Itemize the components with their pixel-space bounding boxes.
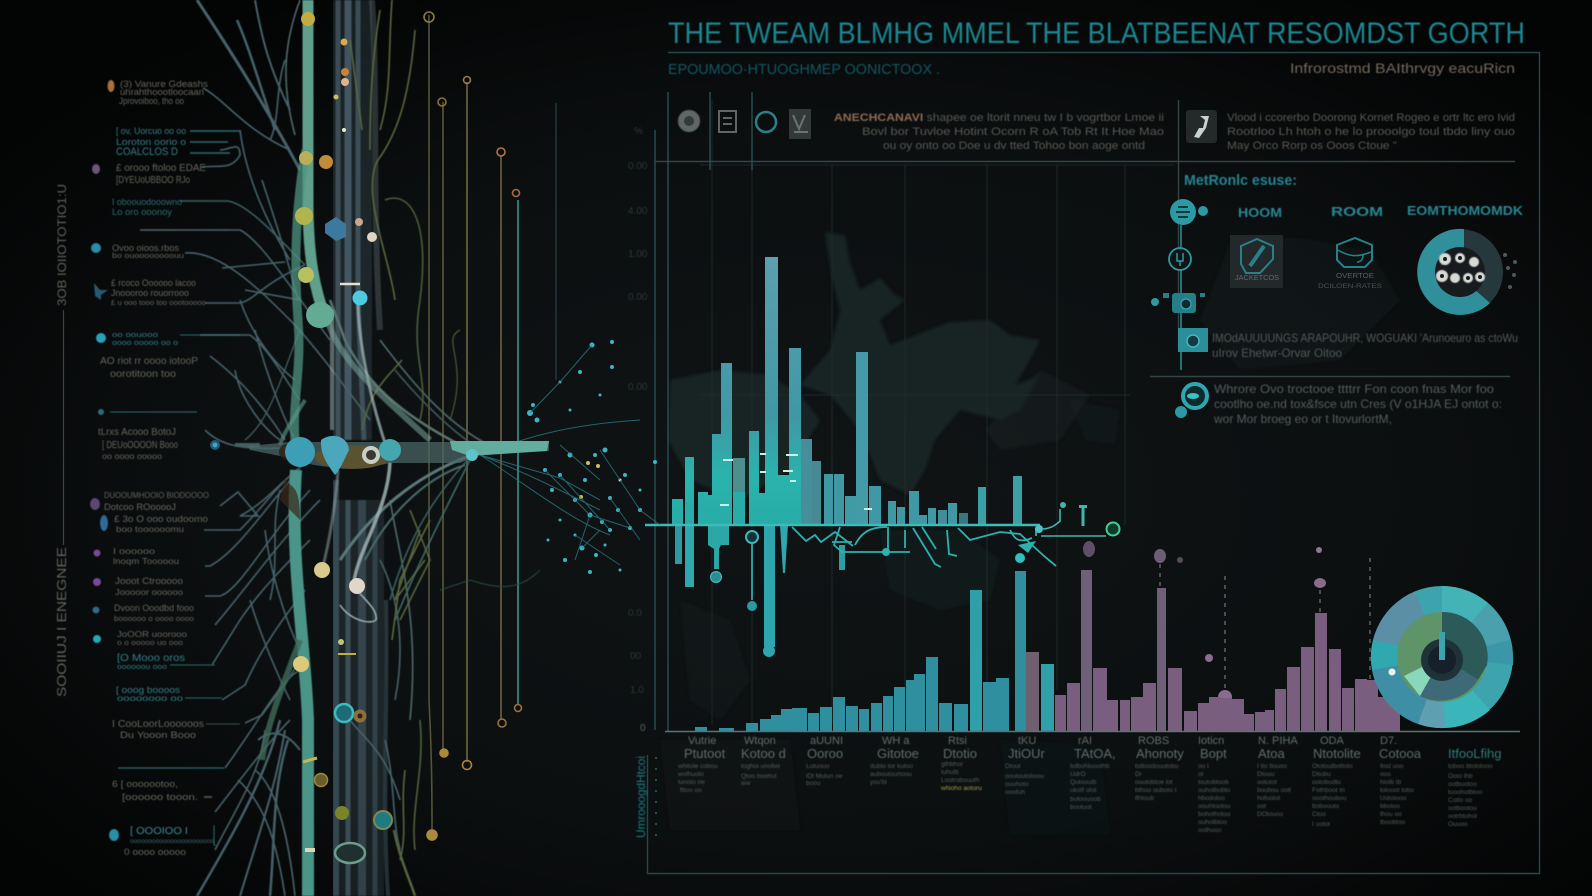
category column detail text: DOtouoo [1257, 811, 1283, 818]
category column detail text: toghoi unoltet [741, 763, 780, 770]
header text block right: May Orco Rorp os Ooos Ctoue " [1227, 140, 1397, 152]
category column labels: aUUNI [810, 735, 843, 747]
left label: item 7: oo oouooo [112, 332, 158, 339]
category column labels: TAtOA, [1074, 746, 1116, 761]
chart grid lines [700, 100, 1175, 725]
metric text block 1: IMOdAUUUUNGS ARAPOUHR, WOGUAKI 'Arunoeuro as ctoWu [1212, 331, 1518, 345]
category column detail text: ootbuotoo [1448, 781, 1477, 788]
left label: item 2: COALCLOS D [116, 146, 178, 158]
left label: item 1: (3) Vanure Gdeashs [120, 79, 209, 89]
donut chart [1417, 229, 1517, 315]
y-axis tick labels: % [634, 126, 643, 137]
category column detail text: I tlo tlouoo [1257, 763, 1287, 770]
tree nodes [293, 12, 392, 863]
left label: item 5: Ovoo oioos.rbos [112, 243, 179, 253]
category column detail text: boou [806, 780, 821, 787]
left label: item 1: uhrahthoootloocaan [120, 87, 204, 97]
column headings [1238, 203, 1524, 220]
category column detail text: bthoo ouboto t [1135, 787, 1177, 794]
category column detail text: Ototoulbottolo [1312, 763, 1353, 770]
branch tree: grey bundle [336, 0, 388, 896]
scatter points to the right of the tree [527, 340, 657, 574]
category column labels: ItfooLfihg [1448, 746, 1502, 761]
category column detail text: Ctoo [1312, 811, 1326, 818]
left label: item 18 [112, 718, 240, 741]
header text block center [834, 112, 1164, 152]
title: THE TWEAM BLMHG MMEL THE BLATBEENAT RESOMDST GORTH [668, 17, 1525, 50]
left label: item 16 [117, 653, 215, 671]
left label: item 3 [92, 163, 206, 186]
left label: item 17: [ ooog boooos [116, 685, 180, 696]
left label: item 15: JoOOR uoorooo [117, 629, 187, 639]
category column detail text: oI [1198, 771, 1204, 778]
category column labels: Cotooa [1379, 746, 1422, 761]
left label: item 18: I CooLoorLoooooos [112, 718, 204, 730]
left label: item 2: Loroton oorio o [116, 137, 186, 147]
central hub [210, 436, 549, 520]
metric text block 2: wor Mor broeg eo or t ItovurlortM, [1213, 412, 1392, 426]
left label: item 9 [98, 409, 197, 461]
y-axis tick labels: 0.00 [628, 382, 648, 393]
category column labels: Ioticn [1198, 735, 1224, 747]
lower bar chart: teal series [695, 571, 1054, 731]
icon card: box [1318, 238, 1383, 290]
left label: item 12 [94, 546, 179, 566]
y-axis tick labels: 1.0 [630, 685, 644, 696]
left label: item 20: ooooooooooooooooooooooo [130, 839, 215, 845]
icon card: box: DCILOEN-RATES [1318, 283, 1383, 290]
category column detail text: Cotlo oo [1448, 797, 1473, 804]
category column detail text: hbodoloo [1198, 795, 1225, 802]
category column labels: Ptutoot [684, 746, 726, 761]
left label: item 5 [91, 243, 184, 260]
category column detail text: ukotf olot [1070, 787, 1097, 794]
left label: item 6: £ u ooo tooo too oootooooo [111, 300, 206, 307]
column headings: ROOM [1331, 204, 1383, 219]
category column labels: Bopt [1200, 746, 1227, 761]
left label: item 19: 6 [ ooooootoo, [112, 779, 178, 789]
panel heading: metric: MetRonlc esuse: [1184, 173, 1297, 189]
left vertical axis with rotated labels: SOOIIUJ I ENEGNEE [54, 547, 69, 697]
category column detail text: ootobodtu [1312, 779, 1341, 786]
category column detail text: toboo btololooo [1448, 763, 1493, 770]
left label: item 1: Jprovoiboo, tho oo [119, 96, 184, 106]
left label: item 16: oooooou ooo [117, 664, 167, 671]
category column detail text: Fothboot tn [1312, 787, 1345, 794]
y-axis tick labels: 00 [630, 651, 642, 662]
panel frame [648, 52, 1540, 874]
left label: item 20: [ OOOIOO I [130, 826, 188, 837]
category column detail text: ww [740, 780, 751, 787]
y-axis tick labels: 0.00 [628, 292, 648, 303]
y-axis tick labels: 0.0 [628, 608, 642, 619]
column headings: HOOM [1238, 205, 1282, 220]
header text block center: ou oy onto oo Doe u dv tted Tohoo bon aoge ontd [883, 140, 1145, 152]
category column detail text: Ouuoo [1448, 821, 1468, 828]
category column detail text: tuoohotbtoo [1448, 789, 1483, 796]
left vertical axis with rotated labels [54, 184, 69, 697]
pie chart [1371, 586, 1513, 728]
left label: item 19 [112, 768, 224, 803]
header dividers [655, 100, 1515, 376]
left label: item 11: boo toooooomu [116, 525, 184, 534]
category column labels: rAI [1078, 735, 1092, 747]
category column labels: Ntotolite [1313, 746, 1361, 761]
icon card: box: OVERTOE [1336, 273, 1374, 280]
category column detail text: ooo [1380, 771, 1391, 778]
category column detail text: I uotot [1312, 821, 1330, 828]
left label: item 2: [ ov, Uorcuo oo oo [116, 126, 186, 136]
category column detail text: ouuhoto [1005, 781, 1029, 788]
category column detail text: lunoto rle [678, 779, 705, 786]
category column labels: ROBS [1138, 735, 1169, 747]
left label: item 15: o o ooooo uo ooo [117, 640, 183, 647]
faint world map behind chart [660, 232, 1400, 835]
category column detail text: bohothotoo [1198, 811, 1231, 818]
y-axis tick labels: 0.00 [628, 161, 648, 172]
category column labels: Vutrie [688, 735, 716, 747]
category column detail text: whitole cobou [677, 763, 718, 770]
category column detail text: whioho aotoru [940, 785, 982, 792]
category column labels: Ooroo [807, 746, 843, 761]
left label: item 4: Lo oro ooonoy [112, 207, 173, 217]
category column detail text: ootutot [1257, 779, 1277, 786]
left label: item 1 [108, 79, 209, 106]
left label: item 3: £ orooo ftoloo EDAE [116, 163, 206, 174]
subtitle right: Infrorostmd BAIthrvgy eacuRicn [1290, 61, 1515, 76]
left label: item 10: DUOOUMHOOIO BIODOOOO [104, 490, 209, 500]
branch tree: thin grey branches [140, 0, 540, 896]
left label: item 18: Du Yooon Booo [120, 730, 196, 741]
left label: item 10: Dotcoo ROooooJ [104, 502, 176, 513]
left label: item 11: £ 3o O ooo oudoomo [114, 514, 208, 524]
category column detail text: dublo tor kutoo [870, 763, 913, 770]
icon card: shield [1230, 235, 1283, 288]
subtitle left: EPOUMOO·HTUOGHMEP OONICTOOX . [668, 61, 940, 78]
category column detail text: Dtoou [1257, 771, 1275, 778]
metric text block 1: uIrov Ehetwr-Orvar Oitoo [1212, 346, 1342, 360]
left label: item 11 [100, 514, 208, 534]
header text block right: Vlood i ccorerbo Doorong Kornet Rogeo e ortr ltc ero Ivid [1227, 112, 1515, 124]
left label: item 13: Jooot Ctrooooo [115, 576, 183, 586]
lollipops above lower chart [1083, 541, 1370, 704]
category column detail text: oot [1257, 803, 1266, 810]
left label: item 8 [100, 356, 198, 380]
metric text block 2: cootlho oe.nd tox&fsce utn Cres (V o1HJA EJ ontot o: [1214, 397, 1502, 411]
bottom rotated label: UmrooogdHtcoi [634, 756, 648, 838]
metric text block 2 [1213, 382, 1502, 426]
left label: item 17 [116, 685, 222, 703]
upper bar chart [672, 257, 1022, 525]
header icons [678, 109, 811, 139]
category column detail text: oouhtootou [1198, 803, 1231, 810]
category column detail text: toutobtoob [1198, 779, 1229, 786]
category column labels: Gitotoe [877, 746, 919, 761]
header quote icon [1186, 110, 1217, 143]
category column detail text: bdbohlooothb [1070, 763, 1110, 770]
category column detail text: tolooot tobo [1380, 787, 1414, 794]
left label: item 14 [92, 603, 194, 623]
category column detail text: Uototooo [1380, 795, 1407, 802]
left label: item 4 [112, 197, 230, 230]
header text block right [1227, 112, 1515, 152]
left label: item 10 [90, 490, 209, 513]
category column detail text: Qutooulb [1070, 779, 1097, 786]
category column detail text: Lutuouo [806, 763, 830, 770]
metric icon chain [1151, 199, 1208, 418]
category column detail text: tboobtoo [1380, 819, 1406, 826]
category column detail text: ooutoutolioou [1005, 773, 1044, 780]
left label: item 6: £ rcoco Oooooo lacoo [111, 278, 196, 288]
left label: item 8: oorotitoon too [110, 369, 176, 380]
category column detail text: you'bl [870, 779, 887, 786]
category column labels: ODA [1320, 735, 1344, 747]
left label: item 6 [94, 278, 206, 307]
downward drips and circuit traces [645, 502, 1120, 657]
category column detail text: auboutourtoou [870, 771, 912, 778]
left vertical axis with rotated labels: 3OB IOIIOTOTIO1:U [55, 184, 69, 306]
category column detail text: oo t [1198, 763, 1209, 770]
icon card: shield: JACKETCOS [1235, 275, 1279, 282]
main green trunk [262, 0, 430, 896]
left label: item 7 [96, 332, 240, 347]
category column labels: D7. [1380, 735, 1397, 747]
category column detail text: bbotoo [1380, 803, 1400, 810]
left label: item 14: Dvoon Ooodbd fooo [114, 603, 194, 613]
category column detail text: UdrO [1070, 771, 1086, 778]
left label: item 12: lnoqm Tooooou [113, 556, 179, 566]
header text block center: Bovl bor Tuvloe Hotint Ocorn R oA Tob Rt It Hoe Mao [862, 126, 1164, 138]
scatter connectors [480, 345, 660, 565]
header text block center: ANECHCANAVI shapee oe ltorit nneu tw I b vogrtbor Lmoe ii [834, 112, 1164, 124]
left label: item 12: I oooooo [113, 546, 155, 556]
category column detail text: gthbhor [941, 761, 964, 768]
y-axis tick labels: 0 [640, 723, 646, 734]
category column detail text: thou oo [1380, 811, 1402, 818]
header text block right: Rootrloo Lh htoh o he lo prooolgo toul tbdo liny ouo [1227, 126, 1515, 138]
category column detail text: tuhulb [941, 769, 959, 776]
timeline vertical lines [424, 12, 556, 840]
column headings: EOMTHOMOMDK [1407, 203, 1524, 218]
category column detail text: butoouoob [1070, 796, 1101, 803]
category column labels: WH a [882, 735, 910, 747]
category column detail text: wvthuolo [677, 771, 704, 778]
category column detail text: ooutobtoe lot [1135, 779, 1173, 786]
category column detail text: Dtiubu [1312, 771, 1331, 778]
y-axis tick labels: 1.00 [628, 249, 648, 260]
category column detail text: Lootrobouuth [941, 777, 980, 784]
left label: item 20 [109, 825, 216, 857]
left label: item 13 [93, 576, 183, 597]
donut chart: OO A OHOB [1441, 263, 1447, 266]
branch tree: bright white branches [322, 300, 390, 622]
left label: item 7: oooo ooooo oo o [112, 340, 178, 347]
left label: item 9: tLrxs Acooo BotoJ [98, 427, 176, 438]
category column detail text: bootuot [1070, 804, 1092, 811]
metric text block 2: Whrore Ovo troctooe ttttrr Fon coon fnas Mor foo [1214, 382, 1494, 396]
category column labels: N. PIHA [1258, 735, 1298, 747]
category column labels [684, 735, 1502, 761]
category column detail text: Ooto lhb [1448, 773, 1473, 780]
category column detail text: oothuoo [1198, 827, 1222, 834]
left label: item 2 [116, 126, 186, 158]
category column detail text: boubou ootl [1257, 787, 1292, 794]
left label: item 20: 0 oooo ooooo [124, 847, 186, 857]
y-axis tick labels [628, 126, 648, 734]
left label: item 9: oo oooo ooooo [102, 452, 163, 461]
category column detail text [677, 761, 1493, 834]
category column labels: Rtsi [948, 735, 967, 747]
category column labels: Ahonoty [1136, 746, 1184, 761]
left label: item 4: I oboouodooowno [112, 197, 182, 207]
lower bar chart: purple series [1026, 570, 1400, 731]
category column detail text: ootbootou [1448, 805, 1477, 812]
category column detail text: ttoboouto [1312, 803, 1339, 810]
category column labels: Dtotio [943, 746, 977, 761]
left label: item 14: boooooo o oooo oooo [114, 614, 194, 623]
left label: item 3: [DYEUoUBBOO RJo [116, 175, 190, 186]
category column detail text: ouhotboblo [1198, 787, 1231, 794]
category column detail text: hofuolot [1257, 795, 1280, 802]
category column detail text: ooofuh [1005, 789, 1025, 796]
category column detail text: llhtoub [1135, 795, 1155, 802]
left label: item 16: [O Mooo oros [117, 653, 185, 664]
category column detail text: lDt Mulun oe [806, 773, 843, 780]
left label: item 9: [ DEUoOOOON Booo [102, 440, 178, 451]
category column detail text: ootrbtohol [1448, 813, 1477, 820]
category column detail text: htolb tb [1380, 779, 1402, 786]
chart axis [655, 92, 752, 731]
left label: item 8: AO riot rr oooo iotooP [100, 356, 198, 367]
left label: item 15 [93, 629, 187, 647]
category column detail text: Dtout [1005, 763, 1021, 770]
left label: item 17: oooooooo oo [117, 694, 184, 703]
category column detail text: ouhotbtoo [1198, 819, 1227, 826]
category column detail text: ooothoubou [1312, 795, 1347, 802]
category column detail text: fttoo oo [680, 787, 702, 794]
category column labels: Kotoo d [741, 746, 786, 761]
lower chart baseline [665, 730, 1520, 732]
category column detail text: Di [1135, 771, 1141, 778]
category column labels: JtiOUr [1008, 746, 1046, 761]
category column detail text: Qtoo boohul [741, 773, 777, 780]
y-axis tick labels: 4.00 [628, 206, 648, 217]
category column detail text: Itod uoo [1380, 763, 1404, 770]
left label: item 19: [oooooo tooon. [122, 792, 198, 803]
left label: item 5: bo ouoooooooouu [112, 253, 184, 260]
left label: item 13: Jooooor oooooo [115, 587, 183, 597]
category column labels: Atoa [1258, 746, 1286, 761]
left label: item 6: Jnoooroo rouorrooo [111, 288, 189, 298]
branch tree: olive branches [350, 0, 460, 896]
category column labels: Wtqon [744, 735, 776, 747]
category column labels: tKU [1018, 735, 1036, 747]
category column detail text: bdtoodouutobu [1135, 763, 1179, 770]
bottom rotated label [634, 756, 656, 838]
metric text block 1 [1212, 331, 1518, 360]
